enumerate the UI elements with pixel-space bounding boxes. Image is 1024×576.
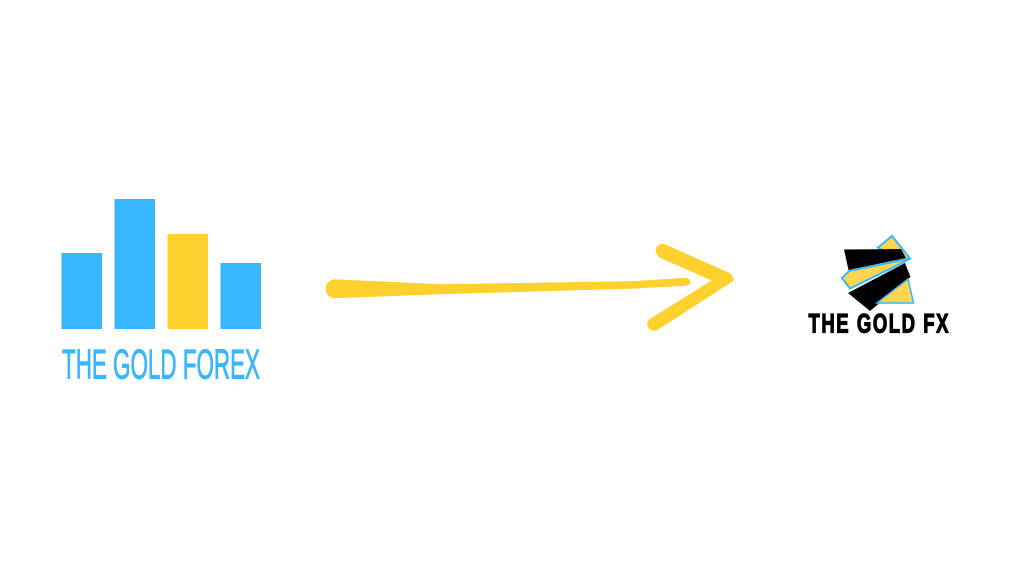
logo emblem <box>842 236 914 311</box>
old logo wordmark: THE GOLD FOREX <box>62 340 260 388</box>
lower black band <box>848 263 910 311</box>
upper triangle with blue outline <box>878 236 910 262</box>
yellow middle band <box>842 258 910 288</box>
arrow head <box>647 244 733 330</box>
top black band <box>844 249 906 270</box>
new logo: The Gold FX <box>808 236 950 338</box>
arrow shaft <box>326 278 690 298</box>
bar chart icon <box>62 199 261 329</box>
new logo wordmark: THE GOLD FX <box>808 308 950 338</box>
old logo: The Gold Forex <box>62 199 261 388</box>
arrow: hand-drawn yellow <box>326 244 733 330</box>
lower triangle <box>877 279 914 303</box>
